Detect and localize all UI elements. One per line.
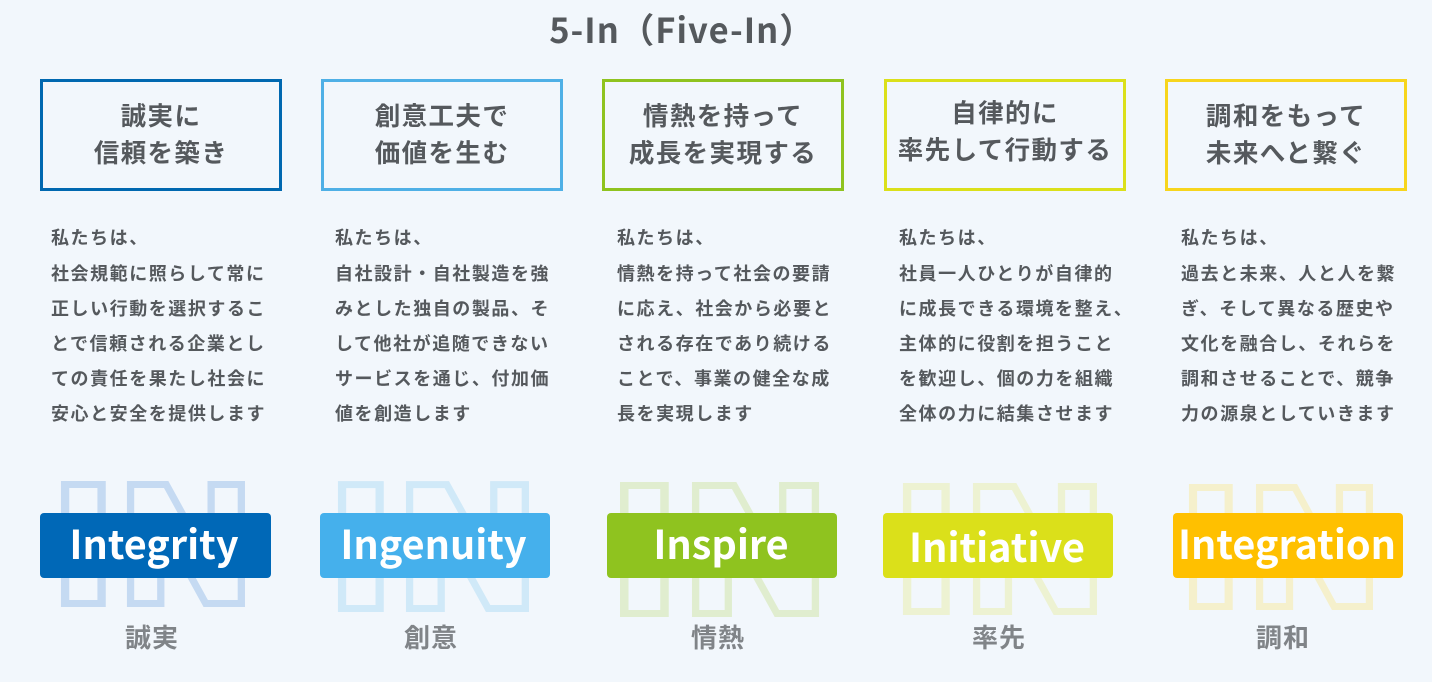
- body text: 率先: 社員一人ひとりが自律的: [899, 260, 1114, 286]
- body text: 誠実: 安心と安全を提供します: [51, 400, 266, 426]
- IN letters: Integrity: N: [115, 453, 257, 643]
- body text: 調和: 過去と未来、人と人を繋: [1181, 260, 1396, 286]
- body text: 創意: みとした独自の製品、そ: [335, 295, 550, 321]
- body text: 情熱: 長を実現します: [617, 400, 754, 426]
- badge: Ingenuity: Ingenuity: [340, 514, 527, 571]
- heading box: 誠実: 信頼を築き: [94, 133, 228, 170]
- body text: 情熱: される存在であり続ける: [617, 330, 832, 356]
- body text: 創意: して他社が追随できない: [335, 330, 550, 356]
- body text: 創意: サービスを通じ、付加価: [335, 365, 550, 391]
- heading box: 誠実: [40, 79, 282, 191]
- body text: 誠実: 私たちは、: [51, 224, 149, 250]
- body text: 率先: に成長できる環境を整え、: [899, 295, 1133, 321]
- IN letters: Integration: [1176, 455, 1385, 646]
- IN letters: Integrity: I: [47, 453, 119, 643]
- badge: Initiative: Initiative: [909, 517, 1085, 574]
- IN letters: Ingenuity: N: [393, 451, 542, 649]
- body text: 調和: 文化を融合し、それらを: [1181, 330, 1396, 356]
- body text: 調和: [1181, 224, 1396, 426]
- IN letters: Inspire: I: [605, 451, 684, 656]
- IN letters: Ingenuity: [324, 451, 542, 649]
- badge: Inspire: [607, 513, 837, 578]
- body text: 誠実: とで信頼される企業とし: [51, 330, 266, 356]
- body text: 誠実: 正しい行動を選択するこ: [51, 295, 266, 321]
- badge: Initiative: [883, 513, 1113, 578]
- IN letters: Integration: N: [1244, 456, 1385, 646]
- body text: 情熱: 情熱を持って社会の要請: [617, 260, 831, 286]
- label: 情熱: 情熱: [691, 618, 745, 655]
- label: 誠実: 誠実: [125, 618, 179, 655]
- body text: 率先: [899, 224, 1133, 426]
- body text: 率先: 私たちは、: [899, 224, 997, 250]
- heading box: 創意: 価値を生む: [375, 133, 509, 170]
- heading box: 率先: [884, 79, 1126, 191]
- IN letters: Inspire: [605, 451, 832, 656]
- badge: Integration: Integration: [1178, 514, 1396, 571]
- heading box: 創意: [321, 79, 563, 191]
- label: 率先: 率先: [972, 618, 1026, 655]
- heading box: 情熱: [602, 79, 844, 191]
- IN letters: Initiative: I: [888, 453, 964, 652]
- badge: Integrity: Integrity: [69, 514, 239, 571]
- body text: 創意: [335, 224, 550, 426]
- heading box: 調和: 調和をもって: [1206, 96, 1366, 133]
- heading box: 調和: 未来へと繋ぐ: [1206, 133, 1366, 170]
- heading box: 率先: 率先して行動する: [898, 130, 1112, 166]
- body text: 情熱: ことで、事業の健全な成: [617, 365, 831, 391]
- body text: 創意: 自社設計・自社製造を強: [335, 260, 550, 286]
- body text: 情熱: [617, 224, 832, 426]
- body text: 率先: を歓迎し、個の力を組織: [899, 365, 1114, 391]
- title: 5-In（Five-In）: [549, 3, 815, 53]
- body text: 創意: 値を創造します: [335, 400, 472, 426]
- body text: 率先: 全体の力に結集させます: [899, 400, 1114, 426]
- IN letters: Integration: I: [1176, 455, 1246, 645]
- body text: 情熱: 私たちは、: [617, 224, 715, 250]
- heading box: 調和: [1165, 79, 1407, 191]
- badge: Inspire: Inspire: [653, 514, 789, 571]
- body text: 調和: 力の源泉としていきます: [1181, 400, 1396, 426]
- badge: Integrity: [40, 513, 271, 578]
- body text: 誠実: [51, 224, 266, 426]
- IN letters: Ingenuity: I: [324, 451, 398, 649]
- heading box: 情熱: 成長を実現する: [629, 133, 817, 170]
- IN letters: Initiative: N: [960, 453, 1110, 653]
- heading box: 誠実: 誠実に: [121, 96, 201, 133]
- body text: 誠実: ての責任を果たし社会に: [51, 365, 266, 391]
- heading box: 情熱: 情熱を持って: [643, 96, 803, 133]
- IN letters: Initiative: [888, 453, 1110, 653]
- label: 創意: 創意: [404, 618, 458, 655]
- body text: 誠実: 社会規範に照らして常に: [51, 260, 266, 286]
- body text: 創意: 私たちは、: [335, 224, 433, 250]
- label: 調和: 調和: [1256, 618, 1310, 655]
- IN letters: Integrity: [47, 453, 257, 643]
- heading box: 創意: 創意工夫で: [375, 96, 509, 133]
- body text: 調和: 私たちは、: [1181, 224, 1279, 250]
- body text: 調和: ぎ、そして異なる歴史や: [1181, 295, 1395, 321]
- body text: 情熱: に応え、社会から必要と: [617, 295, 832, 321]
- IN letters: Inspire: N: [679, 451, 832, 656]
- body text: 調和: 調和させることで、競争: [1181, 365, 1395, 391]
- heading box: 率先: 自律的に: [951, 92, 1059, 130]
- body text: 率先: 主体的に役割を担うこと: [899, 330, 1114, 356]
